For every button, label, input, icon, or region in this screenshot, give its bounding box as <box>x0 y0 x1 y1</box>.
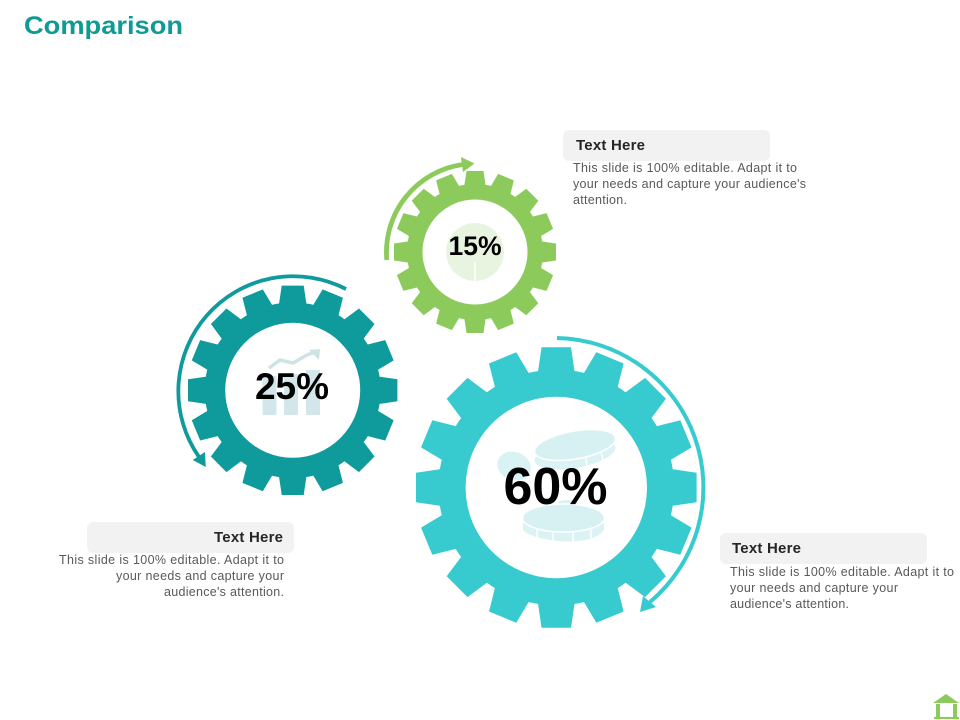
gear hole: cyan <box>466 397 647 578</box>
arrow: green clockwise <box>386 157 474 260</box>
panel: 15% green gear <box>386 157 556 333</box>
callout body: audience's attention. <box>164 585 284 599</box>
gear: teal <box>188 286 397 495</box>
gear: cyan <box>416 347 697 628</box>
gear hole: teal <box>225 323 360 458</box>
callout heading: Text Here <box>214 529 283 546</box>
callout body: This slide is 100% editable. Adapt it to <box>59 553 284 567</box>
callout: bottom left <box>59 522 294 599</box>
arrow: teal counter-clockwise <box>178 276 346 467</box>
callout: top right <box>563 130 806 207</box>
value: 15%: 15% <box>448 231 502 261</box>
callout body: attention. <box>573 193 627 207</box>
callout heading: Text Here <box>732 540 801 557</box>
callout heading bar <box>720 533 927 564</box>
callout: bottom right <box>720 533 954 611</box>
callout heading bar <box>563 130 770 161</box>
icon: home building <box>933 694 959 719</box>
callout body: This slide is 100% editable. Adapt it to <box>730 565 954 579</box>
icon: pie chart <box>446 223 504 282</box>
value: 25%: 25% <box>255 366 329 407</box>
panel: 60% cyan gear <box>416 338 703 628</box>
callout heading: Text Here <box>576 137 645 154</box>
callout body: your needs and capture your <box>730 581 898 595</box>
callout body: your needs and capture your audience's <box>573 177 806 191</box>
gear hole: green <box>422 200 528 304</box>
arrow: cyan clockwise <box>557 338 703 612</box>
callout body: your needs and capture your <box>116 569 284 583</box>
title: Comparison <box>24 12 183 40</box>
icon: growth bar chart <box>262 349 320 415</box>
panel: 25% teal gear <box>178 276 397 495</box>
icon: coins <box>493 424 618 545</box>
callout heading bar <box>87 522 294 553</box>
gear: green <box>394 171 556 333</box>
value: 60%: 60% <box>503 458 608 516</box>
callout body: audience's attention. <box>730 597 849 611</box>
callout body: This slide is 100% editable. Adapt it to <box>573 161 797 175</box>
